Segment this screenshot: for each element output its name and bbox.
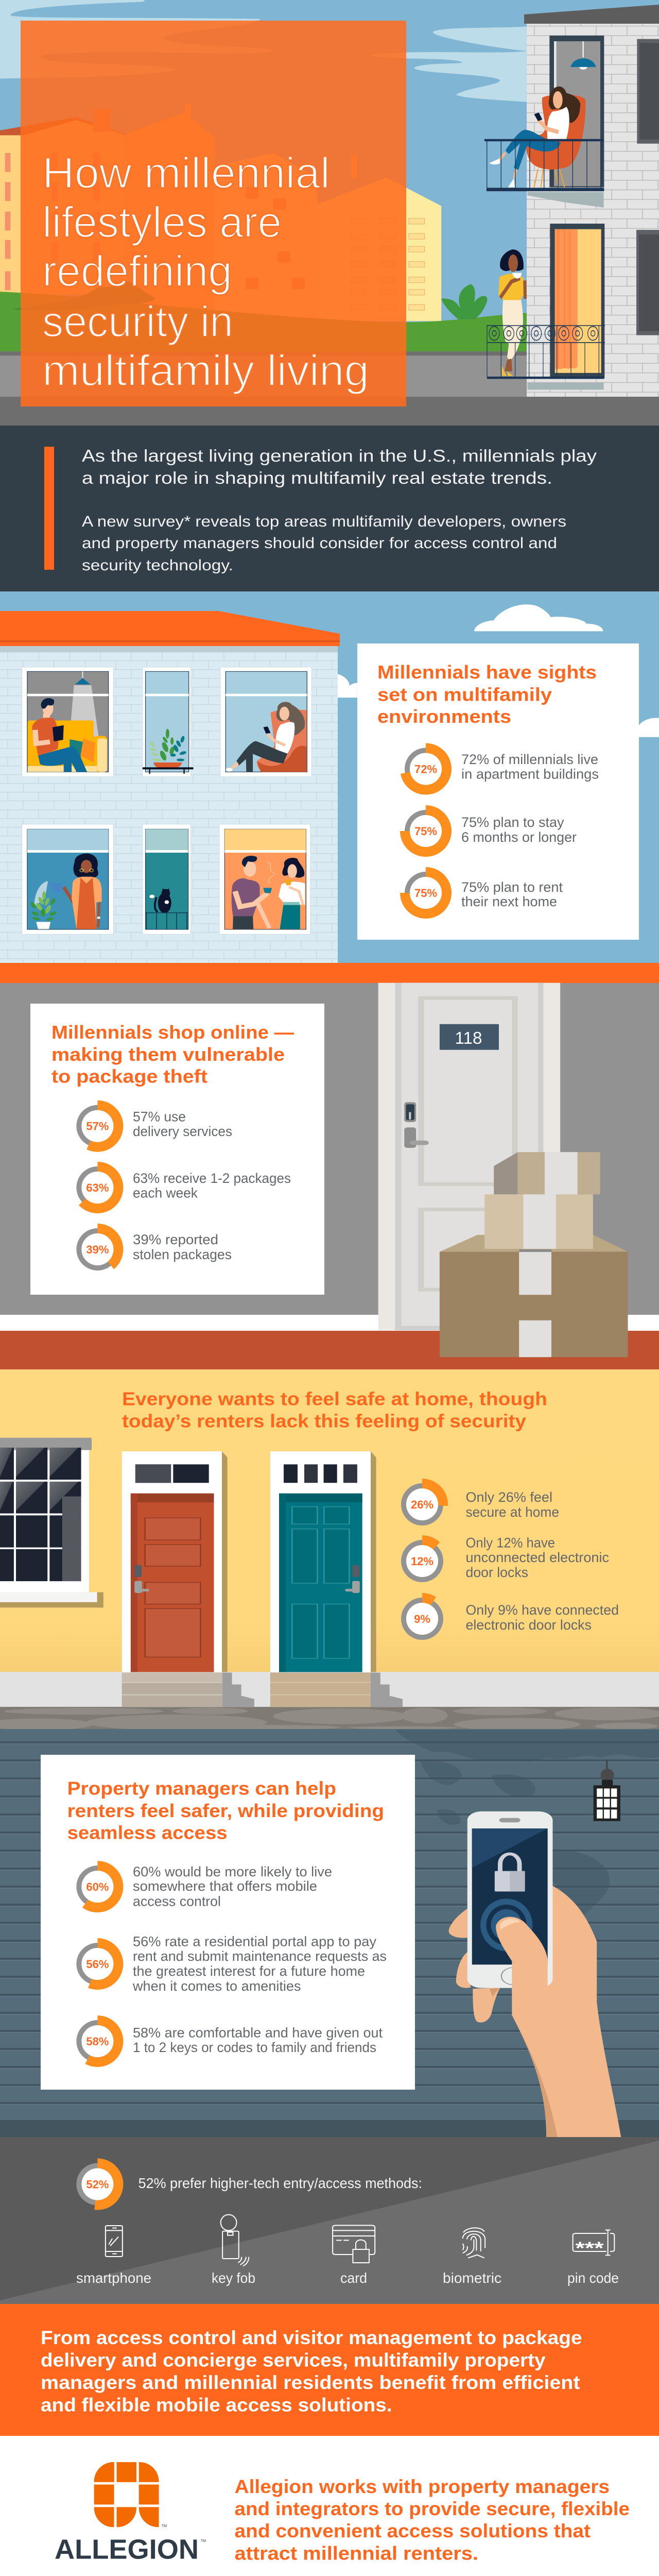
front steps [122,1673,403,1707]
clouds [338,604,659,737]
stat: 9 percent text: electronic door locks [465,1617,592,1633]
window: woman watering plant [22,824,113,934]
title panel: multifamily living [42,346,369,395]
card heading: Property managers can help [67,1778,336,1799]
icon: smartphone [106,2226,123,2257]
donut: 52 percent [77,2163,118,2205]
donut: 57 percent [77,1105,118,1147]
stat: 63 percent text: 63% receive 1-2 packages [133,1171,291,1186]
section heading: Everyone wants to feel safe at home, though [122,1388,547,1410]
grass, plants and road [0,280,659,426]
icon: key fob [221,2215,249,2266]
icon: fingerprint [463,2228,485,2258]
balcony woman in armchair and hanging lamp [484,36,659,335]
stat: 9 percent text [465,1602,619,1633]
card heading [377,662,597,727]
window: couple drinking coffee [219,824,310,934]
card heading: seamless access [67,1822,228,1843]
card heading: environments [377,706,511,727]
stat: 56 percent text [132,1934,387,1994]
teal door [270,1451,376,1672]
donut: 52 percent: 52% [86,2178,109,2191]
donut: 75 percent stay: 75% [414,825,437,838]
panel: intro text: As the largest living generation in the U.S., millennials play [82,446,597,465]
stat: 58 percent text [133,2025,383,2055]
balcony woman with cup and curtained door [487,224,605,389]
icon: pin code [573,2230,614,2258]
logo: Allegion wordmark: ALLEGION [55,2534,199,2565]
logo: Allegion wordmark: TM [162,2524,167,2528]
panel: orange closing statement [0,2304,659,2436]
stat: 72 percent text [461,752,599,782]
stacked cardboard boxes [440,1152,628,1357]
stat: 26 percent text: secure at home [465,1504,559,1520]
panel: feel safe at home street [0,1369,659,1731]
panel: intro text: a major role in shaping multifamily real estate trends. [82,468,552,487]
stat: 56 percent text: when it comes to amenities [132,1978,301,1994]
panel: Allegion footer [0,2436,659,2576]
logo: Allegion wordmark: TM [201,2539,206,2543]
icon labels: biometric [443,2270,501,2286]
donut: 58 percent: 58% [86,2035,109,2048]
donut: 75 percent rent [405,872,447,914]
donut: 60 percent: 60% [86,1880,109,1893]
stat: 26 percent text [465,1489,559,1520]
panel: higher-tech access methods [0,2137,659,2304]
icon labels: smartphone [76,2270,151,2286]
panel: property managers siding wall [0,1729,659,2138]
icon: card with padlock [333,2225,375,2263]
icon: pin code: *** [576,2239,604,2258]
section heading [122,1388,547,1432]
stat: 60 percent text: access control [133,1894,221,1909]
door 118 [378,983,560,1330]
background buildings [0,104,441,321]
stat: 75 percent rent text: their next home [461,894,557,909]
Allegion statement [235,2476,630,2564]
panel: orange closing statement: From access control and visitor management to package [41,2327,582,2348]
panel: intro text: and property managers should consider for access control and [82,535,557,552]
hand holding smartphone with lock [449,1811,621,2138]
panel: orange closing statement: managers and millennial residents benefit from efficient [41,2372,580,2393]
stat: 39 percent text: 39% reported [133,1232,218,1247]
stat: 12 percent text: door locks [465,1565,528,1580]
card: millennials shop online [30,1004,324,1295]
icon labels: key fob [212,2270,255,2286]
stat: 39 percent text [133,1232,232,1262]
panel: package theft hallway [0,963,659,1369]
card: millennials have sights set on multifamily [357,643,639,940]
donut: 75 percent stay [405,810,447,852]
stat: 75 percent stay text: 6 months or longer [461,829,577,845]
stat: 60 percent text [133,1864,332,1909]
icon labels [76,2270,619,2286]
Allegion statement: and integrators to provide secure, flexible [235,2498,630,2519]
card heading [51,1022,294,1087]
stat: 12 percent text: Only 12% have [465,1535,555,1551]
panel: intro text: A new survey* reveals top areas multifamily developers, owners [82,513,566,530]
card heading: making them vulnerable [51,1044,285,1065]
stat: 60 percent text: somewhere that offers mobile [133,1878,317,1894]
red door [122,1451,228,1672]
card heading: renters feel safer, while providing [67,1800,384,1821]
stat: 75 percent stay text [461,815,577,845]
card heading [67,1778,384,1843]
stat: 57 percent text: 57% use [133,1109,186,1124]
donut: 39 percent [77,1228,118,1270]
donut: 72 percent: 72% [414,762,437,776]
donut: 9 percent: 9% [414,1613,430,1625]
card heading: set on multifamily [377,684,552,705]
stat: 63 percent text [133,1171,291,1200]
donut: 39 percent: 39% [86,1243,109,1256]
donut: 63 percent: 63% [86,1181,109,1194]
Allegion statement: Allegion works with property managers [235,2476,610,2497]
donut: 58 percent [77,2021,118,2062]
stat: 39 percent text: stolen packages [133,1247,232,1262]
cobblestones [0,1707,659,1731]
window: man with tablet on sofa [22,667,113,777]
title panel: security in [42,297,233,346]
section heading: today’s renters lack this feeling of security [122,1411,526,1432]
window at left [0,1438,103,1607]
panel: intro text [0,426,659,591]
room number 118: 118 [455,1028,482,1047]
stat: 75 percent rent text [461,879,563,909]
Allegion statement: attract millennial renters. [235,2543,478,2564]
window: woman on phone in armchair [220,667,311,777]
donut: 63 percent [77,1166,118,1209]
window: black cat on railing [143,824,191,934]
donut: 56 percent [77,1943,118,1985]
stat: 26 percent text: Only 26% feel [465,1489,552,1505]
card heading: to package theft [51,1065,207,1087]
donut: 12 percent [402,1540,443,1582]
building wall and roof [0,611,340,963]
stat: 63 percent text: each week [133,1185,198,1200]
stat: 9 percent text: Only 9% have connected [465,1602,619,1618]
stat: 75 percent stay text: 75% plan to stay [461,815,564,830]
donut: 56 percent: 56% [86,1958,109,1971]
stat: 57 percent text: delivery services [133,1124,232,1139]
title panel: redefining [42,247,232,295]
stat: 12 percent text [465,1535,609,1580]
icon labels: card [340,2270,367,2286]
title panel [21,21,406,406]
panel: orange closing statement: and flexible mobile access solutions. [41,2395,392,2416]
card heading: Millennials have sights [377,662,597,683]
stat: 52 percent text: 52% prefer higher-tech entry/access methods: [138,2175,422,2191]
donut: 60 percent [77,1866,118,1907]
panel: apartment building with residents [0,591,659,963]
sky and clouds [0,0,659,426]
title panel: How millennial [42,148,330,197]
stat: 57 percent text [133,1109,232,1139]
wall lantern [594,1760,620,1821]
icon labels: pin code [567,2270,619,2286]
donut: 12 percent: 12% [411,1555,433,1568]
donut: 75 percent rent: 75% [414,887,437,900]
stat: 72 percent text: in apartment buildings [461,767,599,782]
panel: hero street scene [0,0,659,426]
stat: 58 percent text: 1 to 2 keys or codes to family and friends [133,2040,376,2055]
panel: intro text: security technology. [82,557,233,574]
Allegion statement: and convenient access solutions that [235,2520,591,2541]
stat: 72 percent text: 72% of millennials live [461,752,598,767]
card heading: Millennials shop online — [51,1022,294,1043]
title panel: lifestyles are [42,198,282,246]
logo: Allegion mark [94,2462,159,2527]
donut: 9 percent [402,1598,443,1639]
ivy shadow on wall [395,1730,659,1926]
card: property managers can help [41,1755,415,2090]
stat: 58 percent text: 58% are comfortable and have given out [133,2025,383,2041]
donut: 57 percent: 57% [86,1120,109,1133]
window: potted plant on shelf [143,667,194,777]
brick apartment building [484,5,659,397]
panel: orange closing statement: delivery and concierge services, multifamily property [41,2350,546,2371]
stat: 12 percent text: unconnected electronic [465,1550,609,1565]
stat: 56 percent text: rent and submit maintenance requests as [133,1948,387,1964]
donut: 26 percent: 26% [411,1498,433,1511]
stat: 60 percent text: 60% would be more likely to live [133,1864,332,1879]
donut: 72 percent [405,748,447,790]
stat: 56 percent text: the greatest interest for a future home [133,1963,365,1979]
stat: 75 percent rent text: 75% plan to rent [461,879,563,895]
donut: 26 percent [402,1484,443,1525]
stat: 56 percent text: 56% rate a residential portal app to pay [133,1934,376,1950]
